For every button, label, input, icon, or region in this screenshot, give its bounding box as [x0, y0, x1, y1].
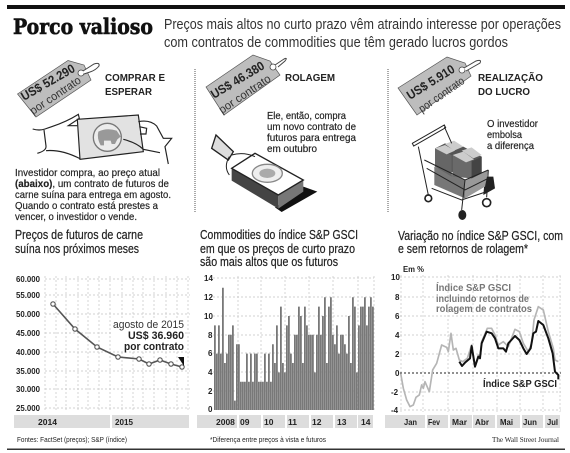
- y axis labels: 25.000: [16, 404, 41, 413]
- year axis: [14, 415, 189, 428]
- month axis: Abr: [475, 417, 490, 427]
- label: black series: Índice S&P GSCI: [483, 377, 557, 390]
- icon: price tag 1: por contrato: [28, 75, 84, 117]
- text: ele entao compra: um novo contrato de: [267, 121, 356, 133]
- subtitle: [164, 17, 561, 51]
- y axis labels: 10: [391, 273, 400, 282]
- year axis: 14: [361, 417, 371, 427]
- year axis: 2015: [115, 417, 133, 427]
- credit: The Wall Street Journal: [492, 435, 559, 444]
- y axis labels: 0: [208, 405, 213, 414]
- y axis labels: 8: [208, 331, 213, 340]
- label: gray series: incluindo retornos de: [436, 293, 529, 305]
- y axis labels: [204, 274, 213, 414]
- y axis labels: 6: [208, 349, 213, 358]
- source note: Fontes: FactSet (preços); S&P (índice): [17, 435, 127, 444]
- unit label: Em %: [403, 265, 424, 274]
- panel: rolagem: [206, 55, 356, 212]
- panel: realizacao do lucro: [398, 57, 543, 220]
- y axis labels: 2: [208, 387, 213, 396]
- month axis: Mar: [452, 417, 468, 427]
- y axis labels: 6: [395, 312, 400, 321]
- heading: rolagem: ROLAGEM: [285, 72, 335, 84]
- heading: comprar e esperar: ESPERAR: [105, 86, 152, 98]
- line: index: [459, 321, 558, 379]
- line: index with roll returns: [401, 307, 558, 407]
- text: investidor compra: vencer, o investidor o vende.: [15, 211, 137, 223]
- heading: chart 2: são mais altos que os futuros: [200, 255, 338, 269]
- text: ele entao compra: Ele, então, compra: [267, 110, 346, 122]
- text: investidor compra: Quando o contrato está prestes a: [15, 200, 158, 212]
- y axis labels: 12: [204, 293, 213, 302]
- heading: chart 2: Commodities do índice S&P GSCI: [200, 228, 358, 242]
- icon: price tag 2: por contrato: [217, 73, 273, 116]
- line series with markers: [51, 302, 184, 369]
- callout: agosto de 2015: por contrato: [124, 341, 184, 353]
- subtitle: com contratos de commodities que têm gerado lucros gordos: [164, 35, 508, 51]
- chart: preços de futuros de carne suína: [14, 275, 190, 428]
- y axis labels: -2: [391, 388, 399, 397]
- y axis labels: 45.000: [16, 329, 41, 338]
- panel: comprar e esperar: [15, 60, 172, 223]
- icon: stack of contracts: [212, 135, 317, 212]
- y axis labels: 0: [395, 369, 400, 378]
- text: o investidor embolsa: embolsa: [487, 129, 522, 141]
- y axis labels: 55.000: [16, 291, 41, 300]
- heading: comprar e esperar: COMPRAR E: [105, 72, 165, 84]
- icon: hands holding contract: [33, 114, 172, 164]
- y axis labels: -4: [391, 406, 399, 415]
- text: o investidor embolsa: O investidor: [487, 118, 538, 130]
- y axis labels: 4: [395, 331, 400, 340]
- y axis labels: 40.000: [16, 348, 41, 357]
- chart: commodities bar chart: [197, 274, 374, 428]
- text: investidor compra: [15, 167, 171, 223]
- heading: chart 2: [200, 228, 358, 269]
- y axis labels: 2: [395, 350, 400, 359]
- heading: chart 3: e sem retornos de rolagem*: [398, 242, 528, 256]
- text: investidor compra: carne suína para entrega em agosto.: [15, 189, 171, 201]
- month axis: Mai: [500, 417, 513, 427]
- heading: chart 2: em que os preços de curto prazo: [200, 242, 355, 256]
- callout: agosto de 2015: [112, 319, 185, 366]
- callout: agosto de 2015: agosto de 2015: [113, 319, 184, 331]
- y axis labels: [16, 275, 41, 413]
- year axis: [197, 415, 373, 428]
- icon: price tag 1: US$ 52.290: [18, 61, 77, 104]
- year axis: 12: [312, 417, 322, 427]
- heading: comprar e esperar: [105, 72, 165, 98]
- year axis: 09: [240, 417, 250, 427]
- callout: agosto de 2015: US$ 36.960: [128, 330, 184, 342]
- icon: price tag 3: US$ 5.910: [404, 62, 457, 103]
- y axis labels: 60.000: [16, 275, 41, 284]
- y axis labels: 50.000: [16, 310, 41, 319]
- icon: price tag 2: US$ 46.380: [208, 59, 267, 102]
- label: gray series: [436, 281, 532, 315]
- y axis labels: 8: [395, 293, 400, 302]
- year axis: 2014: [38, 417, 57, 427]
- label: gray series: rolagem de contratos: [436, 303, 532, 315]
- year axis: 11: [288, 417, 297, 427]
- text: o investidor embolsa: [487, 118, 538, 152]
- y axis labels: [391, 273, 400, 415]
- y axis labels: 4: [208, 368, 213, 377]
- heading: chart 3: [398, 229, 563, 256]
- text: ele entao compra: em outubro: [267, 143, 317, 155]
- text: ele entao compra: futuros para entrega: [267, 132, 356, 144]
- icon: price tag 2: [206, 55, 286, 116]
- icon: price tag 3: por contrato: [417, 75, 467, 115]
- bars: [214, 288, 374, 410]
- heading: realizacao do lucro: REALIZAÇÃO: [478, 71, 543, 84]
- text: ele entao compra: [267, 110, 356, 155]
- heading: chart 1: suína nos próximos meses: [15, 242, 139, 256]
- month axis: [385, 415, 560, 428]
- y axis labels: 30.000: [16, 385, 41, 394]
- month axis: Jun: [523, 417, 537, 427]
- text: investidor compra: (abaixo), um contrato de futuros de: [15, 178, 169, 190]
- icon: shopping cart with contracts: [412, 125, 495, 220]
- year axis: 2008: [216, 417, 235, 427]
- heading: chart 1: Preços de futuros de carne: [15, 228, 143, 242]
- heading: chart 1: [15, 228, 143, 256]
- title: Porco valioso: [13, 14, 153, 39]
- heading: realizacao do lucro: DO LUCRO: [478, 86, 530, 98]
- y axis labels: 10: [204, 312, 213, 321]
- footnote: *Diferença entre preços à vista e futuros: [210, 435, 326, 444]
- text: investidor compra: Investidor compra, ao preço atual: [15, 167, 160, 179]
- year axis: 10: [264, 417, 274, 427]
- chart: variação no índice: [385, 265, 561, 428]
- y axis labels: 35.000: [16, 367, 41, 376]
- month axis: Jul: [547, 417, 558, 427]
- icon: price tag 3: [398, 57, 480, 115]
- month axis: Jan: [404, 417, 417, 427]
- year axis: 13: [337, 417, 347, 427]
- label: gray series: Índice S&P GSCI: [436, 281, 511, 294]
- heading: realizacao do lucro: [478, 71, 543, 98]
- month axis: Fev: [428, 417, 440, 427]
- y axis labels: 14: [204, 274, 213, 283]
- text: o investidor embolsa: a diferença: [487, 140, 534, 152]
- icon: price tag 1: [18, 60, 99, 117]
